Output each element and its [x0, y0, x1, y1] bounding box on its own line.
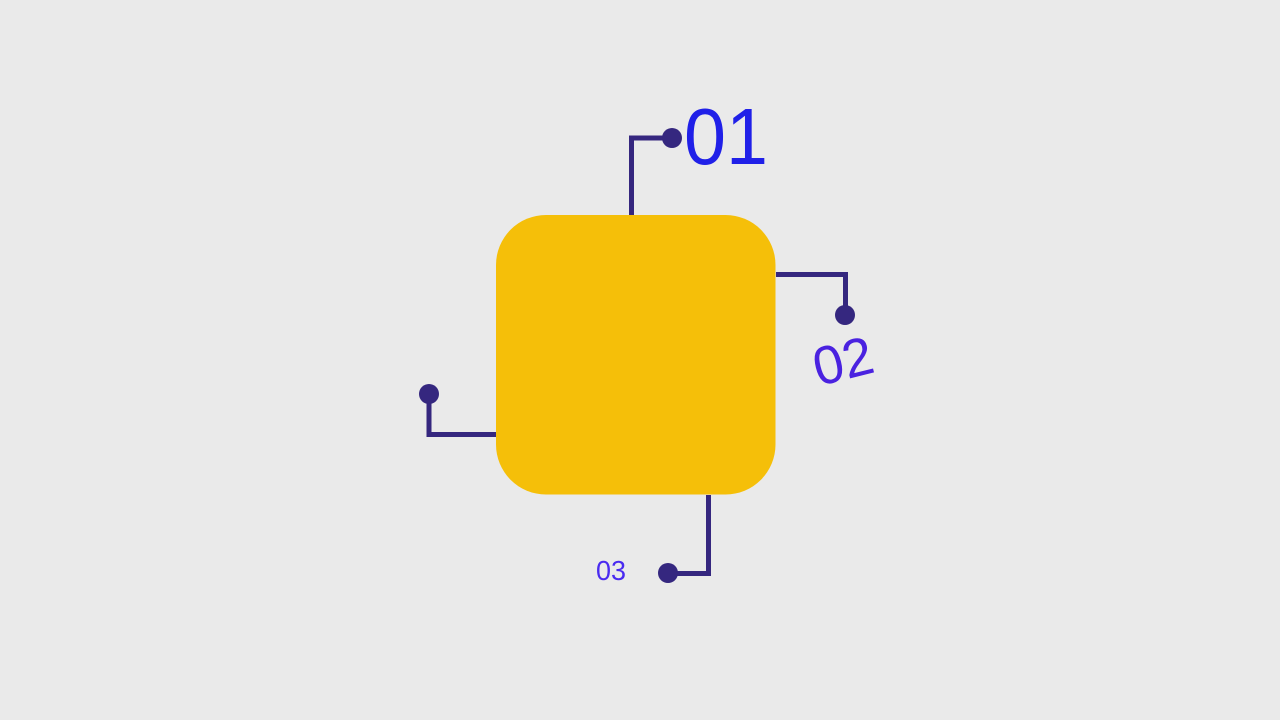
- label 02: 02: [807, 325, 880, 398]
- label 03: 03: [596, 555, 626, 586]
- connector 01: [632, 128, 682, 215]
- connector 02: [776, 274, 855, 325]
- yellow rounded square: [496, 215, 776, 494]
- connector 04: [419, 384, 496, 434]
- connector 03: [658, 495, 708, 583]
- label 01: 01: [684, 92, 768, 181]
